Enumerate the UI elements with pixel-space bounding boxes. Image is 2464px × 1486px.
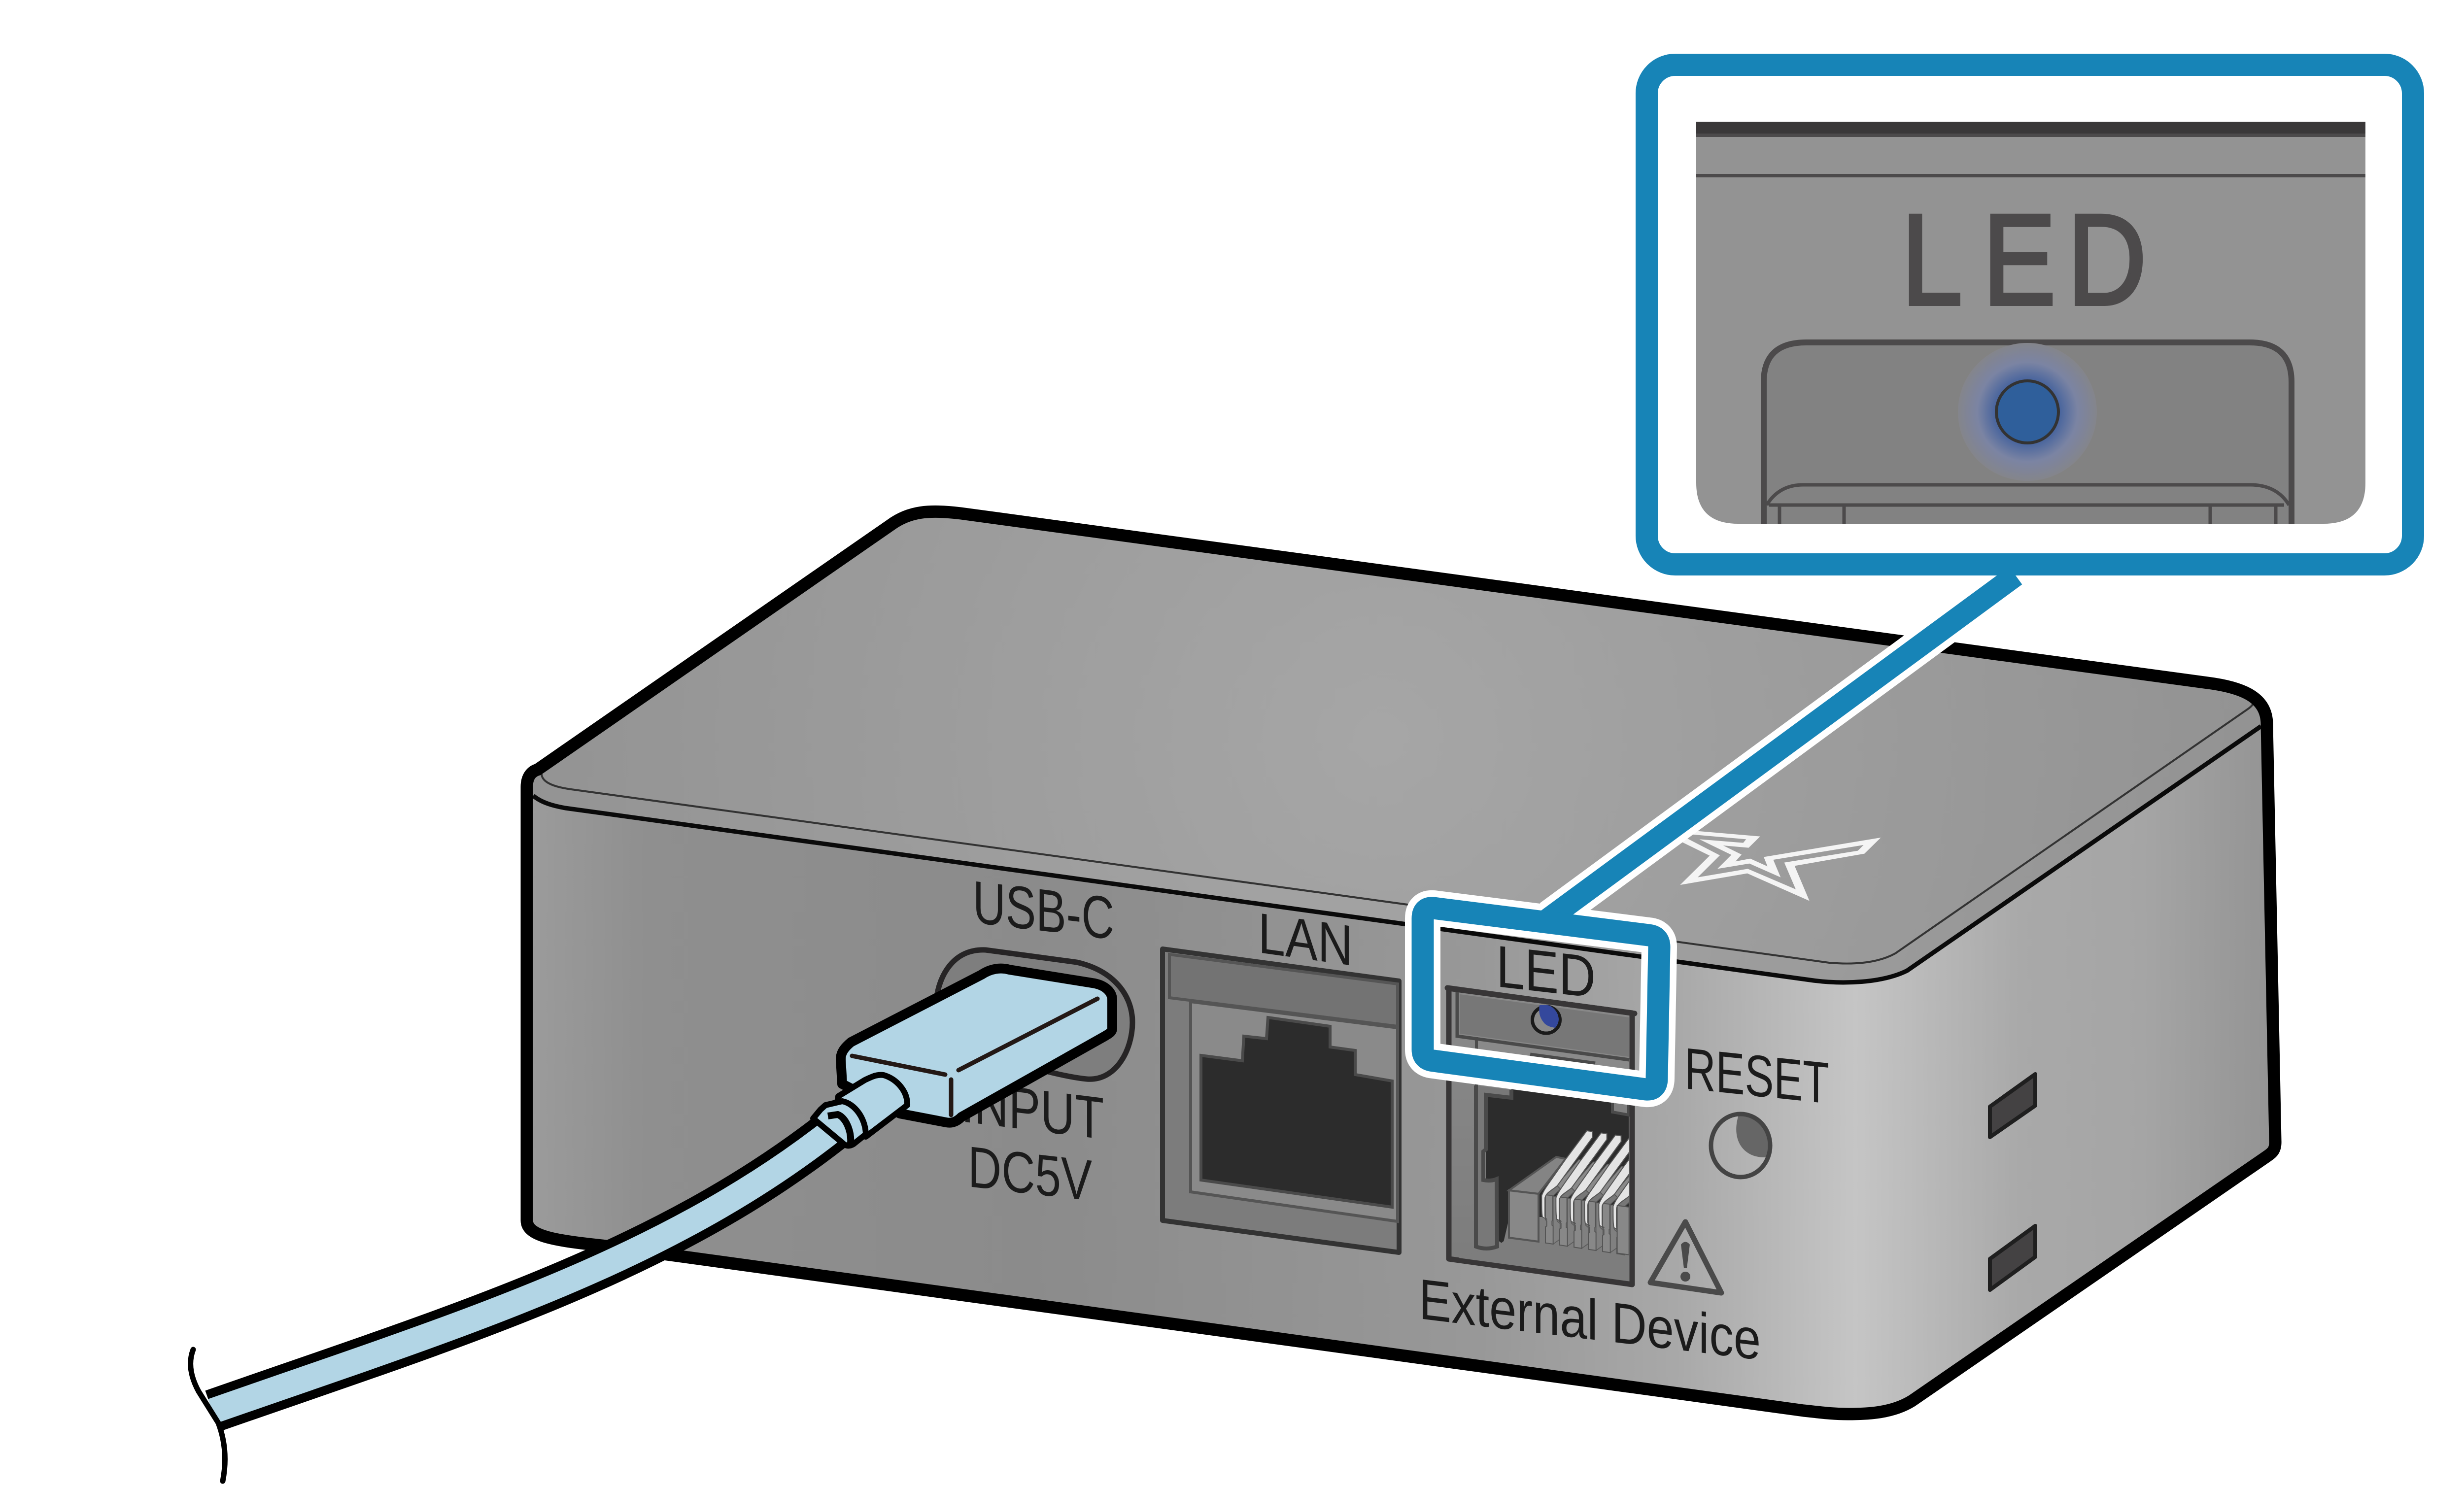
leader line outline bbox=[1550, 575, 2016, 917]
side vents bbox=[1990, 1074, 2035, 1290]
External Device port bbox=[1446, 990, 1635, 1287]
LAN port bbox=[1163, 949, 1399, 1252]
label: External Device: External Device bbox=[1419, 1267, 1761, 1372]
callout grey panel bbox=[1696, 122, 2365, 524]
label: USB-C: USB-C bbox=[973, 868, 1114, 952]
RJ connector block bbox=[1509, 1157, 1566, 1194]
LED glow bbox=[1958, 343, 2097, 481]
icon: warning triangle bbox=[1650, 1222, 1721, 1293]
callout panel: LED enlarged view bbox=[1647, 65, 2413, 565]
USB plug bbox=[813, 969, 1112, 1146]
small highlight frame bbox=[1423, 575, 2016, 1089]
port top edge bbox=[1447, 988, 1635, 1013]
LED lit indicator bbox=[1996, 381, 2058, 443]
label: LAN: LAN bbox=[1258, 901, 1353, 978]
port area bbox=[1764, 342, 2292, 530]
USB cable bbox=[212, 1124, 840, 1411]
contact pins bbox=[1541, 1130, 1629, 1255]
strain relief bbox=[833, 1075, 907, 1137]
device silhouette outline bbox=[527, 511, 2275, 1414]
top dark strip bbox=[1696, 122, 2365, 137]
icon: star logo on lid bbox=[1680, 831, 1881, 901]
seam line bbox=[1696, 174, 2365, 177]
label: DC5V: DC5V bbox=[968, 1134, 1092, 1214]
cable cut squiggle bbox=[191, 1350, 225, 1481]
device body front face bbox=[527, 511, 2275, 1414]
label: RESET: RESET bbox=[1684, 1036, 1829, 1116]
reset button bbox=[1711, 1114, 1774, 1177]
lid seam line bbox=[533, 726, 2261, 982]
LED heading: LED bbox=[1901, 187, 2147, 332]
device top lid bbox=[527, 511, 2267, 982]
callout frame bbox=[1647, 65, 2413, 565]
small LED indicator bbox=[1533, 1005, 1560, 1033]
USB-C port recess bbox=[936, 950, 1132, 1079]
lid inner thin edge bbox=[542, 702, 2254, 964]
label: LED on device: LED bbox=[1496, 933, 1596, 1011]
label: INPUT: INPUT bbox=[961, 1067, 1104, 1152]
